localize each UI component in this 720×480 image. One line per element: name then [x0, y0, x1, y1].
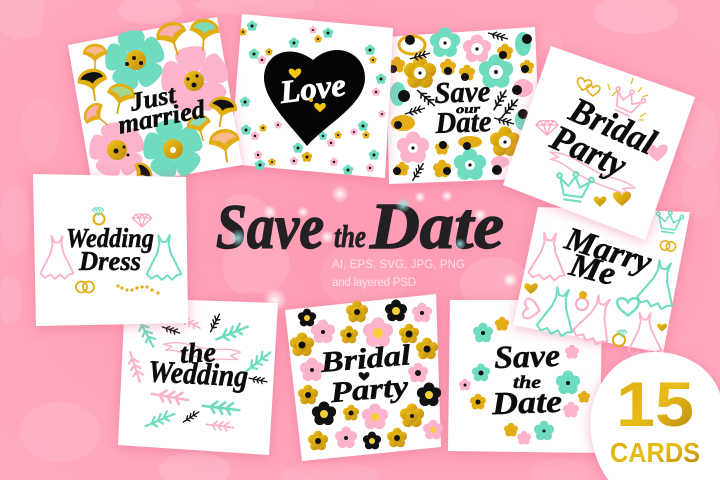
card: bridal party flowers [285, 294, 443, 461]
lettering: Wedding [147, 353, 249, 394]
subtitle: and layered PSD [332, 277, 416, 289]
lettering: Wedding [66, 223, 154, 253]
ribbon [163, 337, 241, 366]
icon: pink dress [40, 236, 74, 279]
card: marry me [513, 207, 690, 356]
card sheet [230, 14, 393, 178]
card: the wedding [118, 298, 278, 455]
label: CARDS [610, 437, 700, 468]
card sheet [68, 17, 242, 190]
lettering: Date [434, 105, 492, 140]
sparkle glows [263, 185, 518, 312]
flowers [290, 300, 443, 450]
card sheet [503, 46, 695, 240]
number: 15 [616, 370, 694, 440]
main title: Save [216, 191, 324, 262]
lettering [66, 223, 154, 276]
icon: teal gem ring [92, 208, 104, 224]
card: wedding dress [33, 174, 188, 326]
mini flowers [239, 21, 386, 175]
main title [216, 190, 504, 263]
gold beads [116, 284, 160, 295]
lettering: Save [434, 75, 491, 110]
lettering [433, 75, 492, 140]
white brush circle [591, 352, 720, 480]
lettering: Party [328, 371, 410, 409]
lettering: Just [126, 80, 179, 117]
card sheet [285, 294, 441, 461]
subtitle: AI, EPS, SVG, JPG, PNG [332, 259, 465, 271]
lettering [490, 337, 563, 421]
icon: gold rings [76, 282, 94, 292]
subtitle [332, 259, 465, 289]
dresses [528, 232, 683, 356]
lettering: Date [490, 383, 563, 421]
card: bridal party crown [503, 46, 695, 240]
lettering: our [456, 101, 481, 116]
icon: pink diamond [132, 214, 152, 227]
lettering: the [179, 337, 217, 370]
lettering [544, 86, 662, 193]
lettering: Bridal [318, 339, 413, 379]
card: save our date [386, 27, 541, 184]
card sheet [448, 300, 602, 453]
card sheet [118, 298, 278, 455]
main title: Date [369, 190, 504, 263]
lettering [147, 337, 249, 394]
lettering: Bridal [563, 89, 662, 162]
card: love [230, 14, 393, 178]
main title: the [334, 218, 366, 254]
card: save the date [448, 300, 602, 453]
lettering: married [115, 94, 208, 140]
lettering: Marry [560, 221, 656, 281]
lettering: Save [493, 337, 561, 375]
flowers [459, 317, 590, 445]
leaf sprigs [127, 313, 274, 434]
card sheet [33, 174, 188, 326]
lettering [318, 339, 416, 410]
card: just married [68, 17, 243, 192]
icon: black heart [264, 50, 365, 146]
card sheet [513, 207, 690, 353]
small gold hearts [289, 69, 326, 112]
icon: teal dress [147, 235, 181, 280]
icon: black heart [359, 372, 369, 381]
lettering [112, 75, 208, 140]
flowers [76, 18, 243, 192]
hearts and rings [522, 209, 684, 346]
lettering: the [513, 372, 541, 392]
icons [536, 77, 668, 207]
lettering: Love: Love [277, 66, 348, 110]
badge: 15 cards [591, 352, 720, 480]
lettering: Party [544, 117, 633, 186]
lettering: Dress [78, 246, 141, 276]
floral decorations [389, 27, 534, 182]
card sheet [386, 27, 541, 184]
lettering: Me [565, 247, 619, 293]
